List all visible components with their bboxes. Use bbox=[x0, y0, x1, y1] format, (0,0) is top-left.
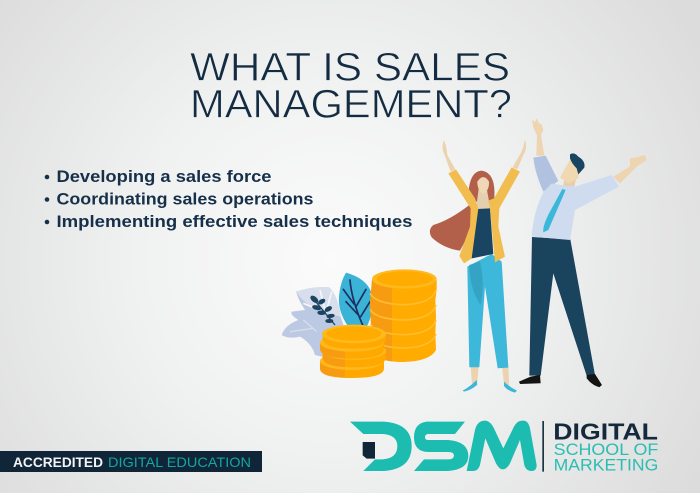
bullet list: Implementing effective sales techniques bbox=[56, 213, 412, 231]
title: MANAGEMENT? bbox=[190, 82, 512, 126]
illustration: man cheering bbox=[519, 118, 647, 387]
legs bbox=[471, 367, 479, 385]
sprig bbox=[310, 295, 335, 325]
upper body bbox=[532, 118, 647, 240]
logo text: DIGITAL bbox=[553, 418, 658, 444]
raised arm and hand bbox=[532, 118, 544, 156]
bullet list bbox=[45, 168, 412, 231]
hair bbox=[430, 205, 477, 251]
pale leaf bbox=[282, 287, 344, 357]
letter M bbox=[467, 421, 537, 471]
lower body bbox=[463, 254, 517, 393]
shirt bbox=[532, 175, 619, 240]
short stack bbox=[320, 325, 386, 378]
letter D bbox=[350, 422, 412, 471]
logo text: SCHOOL OF bbox=[554, 440, 658, 459]
logo: DSM bbox=[350, 418, 658, 474]
jacket bbox=[448, 169, 478, 263]
title bbox=[190, 46, 512, 126]
logo text bbox=[553, 418, 658, 474]
letter S bbox=[414, 422, 468, 471]
title: WHAT IS SALES bbox=[190, 46, 510, 90]
upper body bbox=[430, 139, 526, 263]
sleeve bbox=[533, 156, 558, 192]
banner: accredited digital education bbox=[0, 451, 262, 472]
top bbox=[471, 208, 493, 259]
bullet list: Developing a sales force bbox=[56, 168, 272, 186]
divider bbox=[542, 421, 544, 472]
tall stack bbox=[370, 269, 437, 362]
shoes bbox=[519, 375, 541, 384]
banner: accredited digital education: ACCREDITED bbox=[13, 454, 103, 470]
lower body bbox=[519, 237, 602, 387]
bullet list: Coordinating sales operations bbox=[56, 190, 314, 208]
arms bbox=[442, 140, 455, 172]
illustration: coin stacks bbox=[320, 269, 437, 378]
face bbox=[477, 177, 489, 194]
head bbox=[560, 160, 579, 183]
hair bbox=[570, 153, 585, 174]
trousers bbox=[467, 254, 508, 368]
illustration: leaves behind coins bbox=[282, 273, 372, 357]
neck bbox=[563, 177, 577, 187]
blue leaf bbox=[339, 273, 372, 327]
neck bbox=[476, 188, 491, 210]
extended arm and hand bbox=[613, 155, 647, 183]
tie bbox=[543, 189, 566, 232]
shoes bbox=[463, 380, 477, 392]
illustration: woman cheering bbox=[430, 139, 526, 393]
banner: accredited digital education: DIGITAL EDUCATION bbox=[108, 454, 251, 470]
logo text: MARKETING bbox=[554, 455, 658, 474]
trousers bbox=[529, 237, 595, 376]
